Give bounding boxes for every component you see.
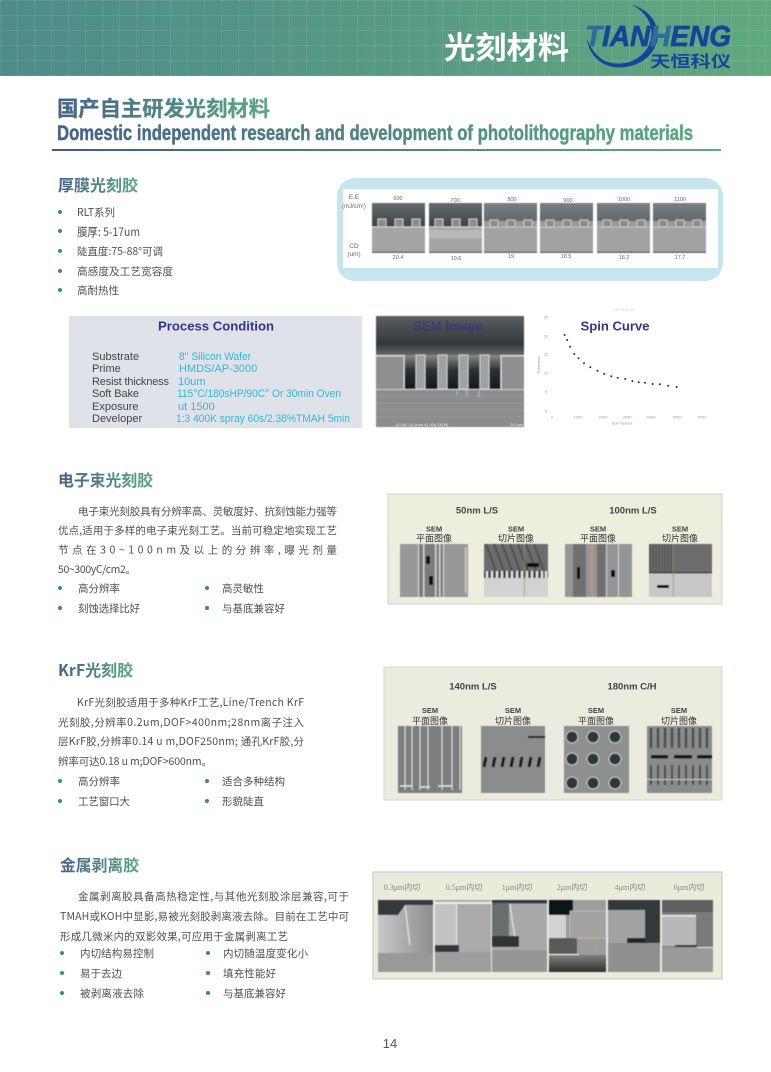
text block: KrF resist description: 层KrF胶,分辨率0.14 u m,DOF250nm; 通孔KrF胶,分 (58, 734, 304, 749)
image: 50nm cross section (484, 544, 548, 597)
bullet list: thick film resist: 高感度及工艺宽容度 (77, 264, 174, 279)
text block: e-beam resist description: 优点,适用于多样的电子束光刻工艺。当前可稳定地实现工艺 (58, 523, 337, 538)
main title (57, 92, 693, 145)
chart: spin curve: 0 (545, 408, 548, 414)
panel: e-beam SEM images: 平面图像 (416, 532, 452, 544)
image: 180nm top view holes (564, 726, 629, 793)
bullet list: e-beam resist: 高分辨率 (78, 581, 120, 596)
panel: e-beam SEM images: SEM (590, 524, 606, 534)
panel: exposure energy SEM series: 19 (508, 254, 514, 260)
section heading: metal lift-off resist: 金属剥离胶 (60, 852, 139, 876)
bullet list: lift-off resist: 填充性能好 (223, 966, 276, 981)
text block: lift-off resist description (60, 889, 349, 944)
bullet list: e-beam resist (58, 581, 286, 616)
panel: KrF SEM images (384, 667, 722, 800)
panel: KrF SEM images: SEM (422, 706, 438, 715)
image: 50nm top view (400, 544, 468, 597)
section heading: e-beam resist: 电子束光刻胶 (58, 467, 153, 491)
panel: KrF SEM images: SEM (671, 706, 687, 715)
bullet list: thick film resist: 膜厚: 5-17um (77, 224, 140, 240)
panel: process condition: Developer (92, 413, 142, 425)
bullet list: e-beam resist: 刻蚀选择比好 (78, 601, 140, 616)
logo: Tianheng: TIANHENG (585, 21, 731, 53)
logo: Tianheng (585, 5, 731, 72)
panel: SEM image: SEM Image (413, 318, 483, 334)
panel: process condition: 10um (178, 376, 206, 388)
chart: spin curve: 6000 (698, 414, 707, 420)
image: 6um undercut (662, 900, 713, 972)
panel: e-beam SEM images: 平面图像 (580, 532, 616, 544)
panel: e-beam SEM images: 切片图像 (662, 532, 698, 544)
text block: e-beam resist description: 电子束光刻胶具有分辨率高、灵敏度好、抗刻蚀能力强等 (78, 504, 338, 519)
chart: spin curve: 4000 (647, 414, 656, 420)
panel: e-beam SEM images: 100nm L/S (609, 506, 657, 516)
panel: e-beam SEM images: SEM (508, 524, 524, 534)
text block: e-beam resist description: 50~300yC/cm2。 (58, 562, 136, 577)
panel: exposure energy SEM series: 18.2 (619, 255, 629, 261)
image: 1um undercut (492, 900, 547, 972)
panel: exposure energy SEM series: 700 (450, 198, 460, 204)
image: 100nm top view (565, 544, 632, 597)
chart: spin curve: 5 (545, 390, 548, 394)
panel: exposure energy SEM series: 800 (507, 197, 517, 203)
bullet list: e-beam resist: 高灵敏性 (222, 581, 264, 596)
panel: KrF SEM images: 140nm L/S (449, 682, 497, 692)
panel: process condition: Substrate (92, 351, 139, 363)
panel: process condition: Process Condition (158, 318, 274, 334)
image: 0.3um undercut (378, 900, 433, 972)
chart: spin curve: Spin Curve (580, 318, 650, 334)
chart: spin curve: 0 (551, 414, 554, 420)
panel: process condition: 1:3 400K spray 60s/2.38%TMAH 5min (176, 413, 350, 425)
panel: exposure energy SEM series: 900 (563, 198, 573, 204)
logo: Tianheng: 天恒科仪 (650, 48, 731, 72)
header title: 光刻材料 (444, 23, 569, 68)
bullet list: lift-off resist (60, 946, 308, 1001)
panel: process condition: Prime (92, 363, 121, 375)
panel: KrF SEM images: SEM (505, 706, 521, 715)
panel: exposure energy SEM series: 20.4 (393, 255, 403, 261)
panel: KrF SEM images: 切片图像 (495, 714, 531, 727)
chart: spin curve: 20 (544, 334, 549, 338)
chart: spin curve (536, 307, 707, 426)
chart: spin curve: 3000 (623, 414, 632, 420)
panel: lift-off SEM images: 2μm内切 (557, 882, 587, 892)
main title: 国产自主研发光刻材料 (57, 92, 270, 123)
title rule (52, 149, 721, 151)
chart: spin curve: 5000 (673, 414, 682, 420)
text block: e-beam resist description (58, 504, 338, 577)
chart: spin curve: 10 (544, 370, 549, 376)
panel: e-beam SEM images (388, 494, 722, 604)
image: 4um undercut (608, 900, 660, 972)
chart: spin curve: RLT3.5 15* (615, 307, 635, 312)
panel: SEM image: 10.0kV 10.1mm x2.00k SE(M) (395, 422, 449, 427)
text block: KrF resist description: KrF光刻胶适用于多种KrF工艺,Line/Trench KrF (77, 695, 304, 710)
panel: exposure energy SEM series: 1000 (618, 197, 630, 203)
panel: KrF SEM images: SEM (588, 706, 604, 715)
text block: KrF resist description: 光刻胶,分辨率0.2um,DOF>400nm;28nm离子注入 (58, 715, 304, 730)
image: 140nm cross section (481, 726, 545, 793)
bullet list: lift-off resist: 与基底兼容好 (223, 986, 286, 1001)
image: 2um undercut (549, 900, 606, 972)
panel: exposure energy SEM series: CD (349, 243, 359, 250)
text block: lift-off resist description: 形成几微米内的双影效果,可应用于金属剥离工艺 (60, 929, 288, 944)
panel: process condition: 8'' Silicon Wafer (179, 351, 251, 363)
panel: SEM image: 20.0um (510, 422, 524, 427)
bullet list: e-beam resist: 与基底兼容好 (222, 601, 286, 616)
bullet list: thick film resist: 陡直度:75-88°可调 (77, 244, 163, 259)
bullet list: KrF resist (58, 774, 285, 809)
page number: 14 (383, 1036, 397, 1051)
panel: e-beam SEM images: SEM (426, 524, 442, 534)
bullet list: lift-off resist: 内切随温度变化小 (223, 946, 308, 961)
panel: process condition: 115°C/180sHP/90C° Or 30min Oven (177, 388, 341, 400)
panel: exposure energy SEM series: 600 (393, 196, 403, 202)
panel: process condition: HMDS/AP-3000 (179, 363, 257, 375)
panel: KrF SEM images: 180nm C/H (607, 682, 657, 692)
panel: SEM image (376, 316, 524, 427)
panel: process condition: ut 1500 (178, 401, 215, 413)
section heading: thick film resist: 厚膜光刻胶 (58, 172, 138, 196)
text block: KrF resist description: 辨率可达0.18 u m;DOF>600nm。 (58, 754, 212, 769)
panel: exposure energy SEM series: 19.6 (451, 256, 461, 262)
panel: e-beam SEM images: SEM (672, 524, 688, 534)
panel: lift-off SEM images: 0.5μm内切 (446, 882, 482, 892)
panel: exposure energy SEM series: 18.5 (561, 254, 571, 260)
bullet list: lift-off resist: 被剥离液去除 (80, 986, 144, 1001)
panel: KrF SEM images: 平面图像 (578, 714, 614, 727)
chart: spin curve: Thickness (536, 356, 541, 374)
text block: e-beam resist description: 节点在30~100nm及以上的分辨率,曝光剂量 (58, 542, 338, 558)
chart: spin curve: Spin Speed (612, 420, 632, 426)
panel: lift-off SEM images: 6μm内切 (674, 882, 704, 892)
section heading: KrF resist: KrF光刻胶 (58, 657, 133, 681)
panel: lift-off SEM images: 1μm内切 (502, 882, 532, 892)
panel: exposure energy SEM series: 17.7 (675, 255, 685, 261)
bullet list: KrF resist: 工艺窗口大 (78, 794, 130, 809)
panel: exposure energy SEM series (337, 178, 723, 281)
chart: spin curve: 1000 (574, 414, 583, 420)
image: 140nm top view (398, 726, 462, 793)
bullet list: KrF resist: 适合多种结构 (222, 774, 285, 789)
panel: process condition: Exposure (92, 401, 138, 413)
bullet list: KrF resist: 高分辨率 (78, 774, 120, 789)
panel: lift-off SEM images (373, 872, 722, 979)
header band (0, 0, 771, 76)
text block: KrF resist description (58, 695, 304, 769)
panel: KrF SEM images: 切片图像 (661, 714, 697, 727)
panel: process condition: Soft Bake (92, 388, 139, 400)
panel: exposure energy SEM series: E.E (349, 194, 360, 201)
text block: lift-off resist description: 金属剥离胶具备高热稳定性,与其他光刻胶涂层兼容,可于 (78, 889, 349, 904)
panel: e-beam SEM images: 切片图像 (498, 532, 534, 544)
panel: KrF SEM images: 平面图像 (412, 714, 448, 727)
text block: lift-off resist description: TMAH或KOH中显影,易被光刻胶剥离液去除。目前在工艺中可 (60, 909, 349, 924)
bullet list: thick film resist (58, 205, 174, 298)
chart: spin curve: 15 (544, 352, 549, 356)
panel: process condition (69, 316, 362, 428)
panel: lift-off SEM images: 0.3μm内切 (384, 882, 420, 892)
panel: exposure energy SEM series: 1100 (674, 197, 686, 203)
panel: e-beam SEM images: 50nm L/S (456, 506, 498, 516)
panel: process condition: Resist thickness (92, 376, 170, 388)
panel: lift-off SEM images: 4μm内切 (615, 882, 645, 892)
chart: spin curve: 25 (544, 314, 549, 320)
bullet list: thick film resist: RLT系列 (77, 205, 115, 220)
panel: exposure energy SEM series: (mJ/cm²) (342, 204, 366, 210)
bullet list: thick film resist: 高耐热性 (77, 283, 119, 298)
panel: exposure energy SEM series: (um) (347, 251, 361, 258)
image: 180nm cross section (647, 726, 712, 793)
bullet list: lift-off resist: 内切结构易控制 (80, 946, 154, 961)
image: 100nm cross section (649, 544, 712, 597)
image: 0.5um undercut (435, 900, 491, 972)
bullet list: KrF resist: 形貌陡直 (222, 794, 264, 809)
chart: spin curve: 2000 (599, 414, 608, 420)
bullet list: lift-off resist: 易于去边 (80, 966, 122, 981)
